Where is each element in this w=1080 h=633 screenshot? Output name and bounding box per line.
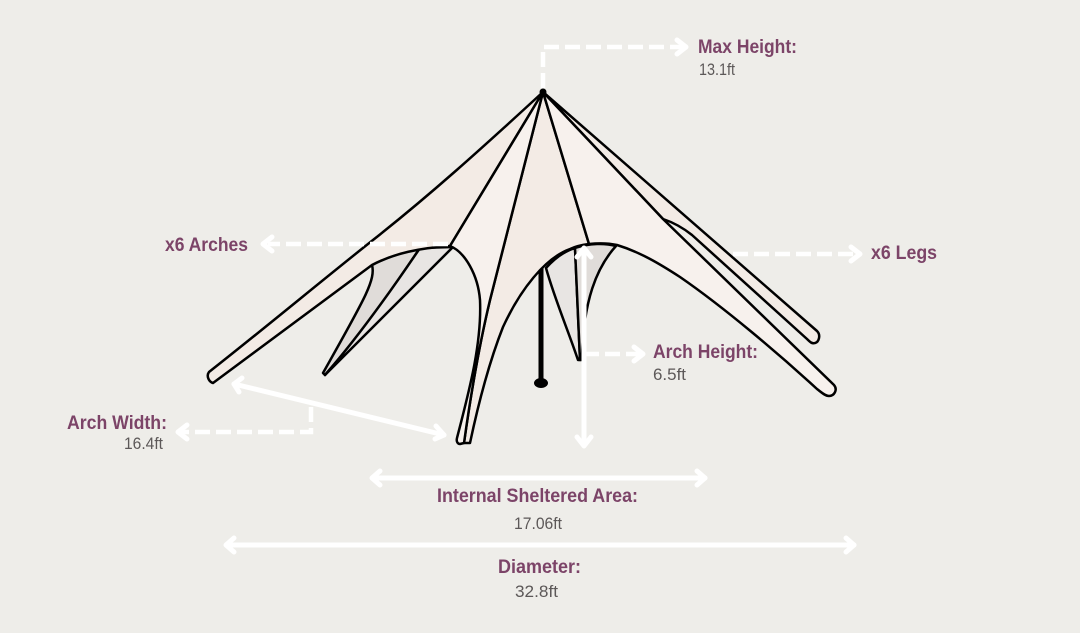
callout: arch width: [67, 378, 444, 453]
left canopy panel and leg: [208, 92, 543, 383]
apex cap: [540, 88, 546, 96]
measure: diameter: [226, 538, 854, 601]
callout: arch width: Arch Width:: [67, 413, 167, 434]
measure: internal sheltered area: [372, 471, 705, 533]
left front canopy panel and leg: [450, 92, 543, 444]
pole: [534, 265, 548, 388]
measure: diameter: 32.8ft: [515, 582, 558, 601]
callout: arch width: 16.4ft: [124, 434, 163, 453]
callout: arch height: [577, 248, 758, 446]
centre canopy panel: [464, 92, 589, 443]
measure: internal sheltered area: Internal Sheltered Area:: [437, 486, 638, 507]
callout: arches: [165, 235, 448, 256]
callout: arch height: Arch Height:: [653, 342, 758, 363]
callout: legs: x6 Legs: [871, 243, 937, 264]
callout: arch height: 6.5ft: [653, 365, 686, 384]
measure: internal sheltered area: 17.06ft: [514, 514, 562, 533]
back left arch panels: [323, 247, 453, 375]
callout: arches: x6 Arches: [165, 235, 248, 256]
back right leg: [543, 92, 819, 343]
back right arch panels: [546, 244, 616, 360]
callout: max height: [543, 37, 797, 88]
callout: max height: Max Height:: [698, 37, 797, 58]
callout: max height: 13.1ft: [699, 60, 735, 79]
callout: legs: [733, 243, 937, 264]
measure: diameter: Diameter:: [498, 557, 581, 578]
illustration: star tent: [208, 88, 836, 444]
right canopy panel and leg: [543, 92, 836, 396]
